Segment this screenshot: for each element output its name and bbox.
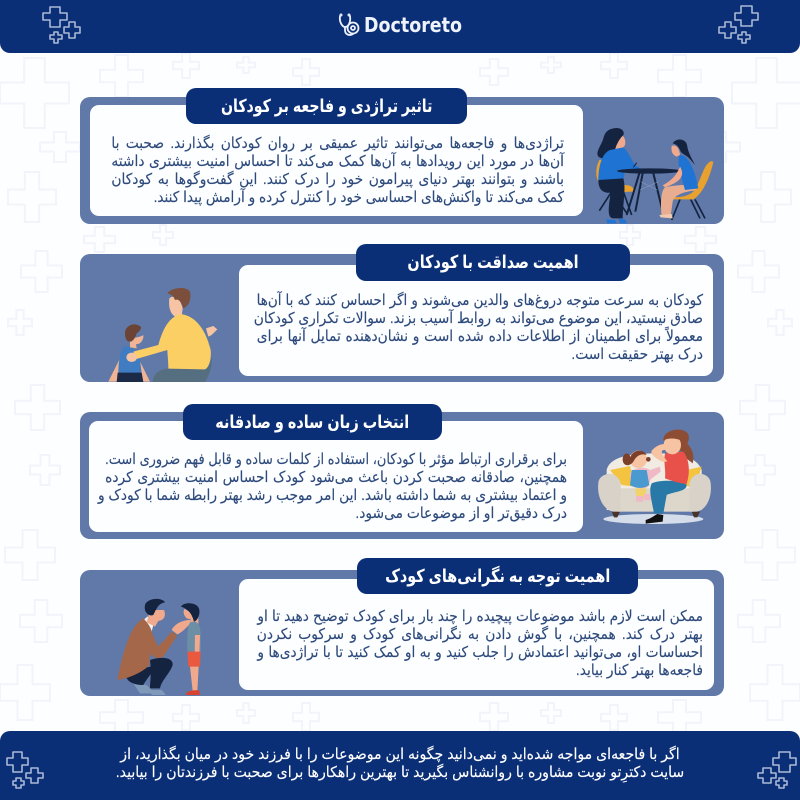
illustration: woman and girl at table bbox=[596, 128, 714, 224]
panel 1 paragraph: کمک می‌کند تا واکنش‌های احساسی خود را کنترل کرده و آرامش پیدا کنند. bbox=[154, 189, 564, 206]
panel 4 paragraph: بهتر درک کند. همچنین، با گوش دادن به نگرانی‌های کودک و سرکوب نکردن bbox=[257, 626, 703, 643]
panel 2 paragraph: کودکان به سرعت متوجه دروغ‌های والدین می‌شوند و اگر احساس کنند که با آن‌ها bbox=[257, 292, 703, 309]
panel 4 text box bbox=[239, 579, 714, 690]
panel 1 text box bbox=[90, 105, 583, 216]
closing message bbox=[116, 746, 684, 783]
icon: crosses bottom left bbox=[6, 751, 44, 789]
panel 4 paragraph bbox=[256, 608, 703, 679]
panel 4 paragraph: فاجعه‌ها بهتر کنار بیاید. bbox=[576, 662, 703, 679]
panel 3 paragraph: و اعتماد بیشتری به شما داشته باشد. این امر موجب رشد بهتر رابطه شما با کودک و bbox=[98, 487, 567, 504]
panel 2 paragraph: درک بهتر حقیقت است. bbox=[571, 346, 703, 363]
panel: honesty with children bbox=[80, 254, 724, 382]
panel: trauma and children bbox=[80, 97, 724, 224]
panel 4 paragraph: ممکن است لازم باشد موضوعات پیچیده را چند بار برای کودک توضیح دهید تا او bbox=[257, 608, 703, 625]
panel 2 text box bbox=[239, 265, 713, 376]
illustration: man comforting boy bbox=[117, 598, 201, 695]
top header bar bbox=[0, 0, 800, 53]
panel 1 heading bbox=[186, 88, 467, 124]
panel 3 paragraph: درک دقیق‌تر او از موضوعات می‌شود. bbox=[355, 505, 567, 522]
closing message: سایت دکترِتو نوبت مشاوره با روانشناس بگیرید تا بهترین راهکارها برای صحبت با فرزندتان را بیابید. bbox=[116, 764, 684, 781]
panel 3 heading bbox=[183, 404, 442, 440]
panel 2 heading bbox=[356, 244, 630, 281]
icon: crosses right bbox=[718, 5, 759, 44]
panel 3 paragraph: همچنین، صادقانه صحبت کردن باعث می‌شود کودک احساس امنیت بیشتری کرده bbox=[105, 469, 567, 486]
panel: attention to child worries bbox=[80, 570, 724, 696]
panel 1 heading: تاثیر تراژدی و فاجعه بر کودکان bbox=[221, 96, 432, 116]
icon: crosses left bbox=[42, 6, 81, 44]
panel 2 paragraph: معمولاً برای اطمینان از اطلاعات داده شده است و نشان‌دهنده تمایل آنها برای bbox=[257, 328, 703, 345]
bottom call-to-action bar bbox=[0, 731, 800, 800]
closing message: اگر با فاجعه‌ای مواجه شده‌اید و نمی‌دانید چگونه این موضوعات را با فرزند خود در میان بگذارید، از bbox=[120, 746, 680, 763]
panel 2 heading: اهمیت صداقت با کودکان bbox=[407, 252, 579, 272]
panel 1 paragraph: تراژدی‌ها و فاجعه‌ها می‌توانند تاثیر عمیقی بر روان کودکان بگذارند. صحبت با bbox=[111, 135, 564, 152]
panel 2 paragraph: صادق نیستید، این موضوع می‌تواند به روابط آسیب بزند. سوالات تکراری کودکان bbox=[254, 310, 703, 327]
icon: crosses bottom right bbox=[757, 751, 797, 789]
illustration: father and son bbox=[108, 288, 218, 382]
panel 1 paragraph bbox=[111, 134, 565, 206]
illustration: mother and daughter on sofa bbox=[598, 430, 711, 524]
panel 3 text box bbox=[89, 421, 583, 532]
panel 1 paragraph: آن‌ها در مورد این رویدادها به آن‌ها کمک می‌کند تا احساس امنیت بیشتری داشته bbox=[111, 153, 564, 170]
logo: Doctoreto: Doctoreto bbox=[364, 13, 462, 37]
panel 4 heading bbox=[357, 558, 638, 594]
panel 4 heading: اهمیت توجه به نگرانی‌های کودک bbox=[385, 566, 610, 586]
panel 3 paragraph: برای برقراری ارتباط مؤثر با کودکان، استفاده از کلمات ساده و قابل فهم ضروری است. bbox=[105, 451, 567, 468]
panel 3 heading: انتخاب زبان ساده و صادقانه bbox=[216, 412, 409, 432]
panel 4 paragraph: احساسات او، می‌توانید اعتمادش را جلب کنید و به او کمک کنید تا با تراژدی‌ها و bbox=[257, 644, 703, 661]
panel 1 paragraph: باشند و بتوانند بهتر دنیای پیرامون خود را درک کنند. این گفت‌وگوها به کودکان bbox=[111, 171, 564, 188]
panel 2 paragraph bbox=[254, 291, 704, 363]
panel: simple honest language bbox=[80, 412, 724, 539]
panel 3 paragraph bbox=[97, 451, 567, 522]
